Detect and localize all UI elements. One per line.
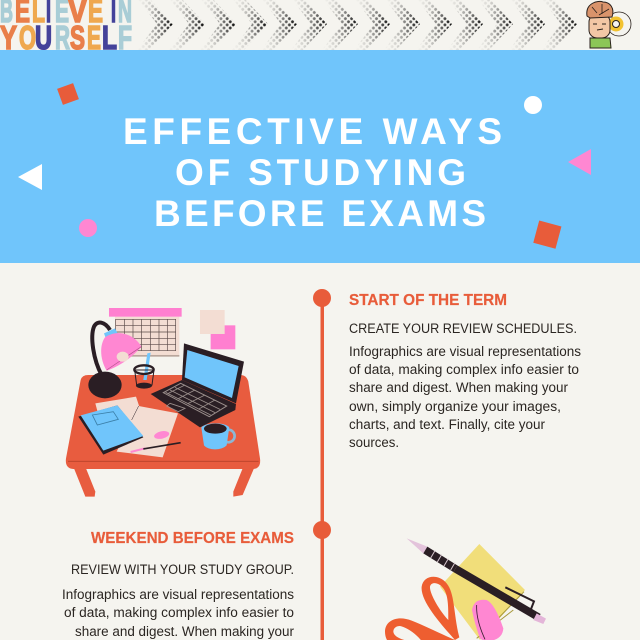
banner background <box>0 50 640 263</box>
mechanical pencil <box>407 538 546 624</box>
header strip lettering: believe in yourself: E <box>87 19 101 56</box>
yellow notepad <box>440 544 525 640</box>
pink eraser <box>472 600 503 640</box>
text block: start of the term: charts, and text. Finally, cite your <box>349 417 545 432</box>
illustration: school supplies <box>385 538 546 640</box>
text block: weekend before exams: REVIEW WITH YOUR STUDY GROUP. <box>71 562 294 577</box>
title: OF STUDYING <box>175 152 466 193</box>
notebook <box>78 405 143 455</box>
title <box>123 111 502 234</box>
header strip lettering: believe in yourself <box>0 0 132 56</box>
halftone chevron band <box>137 0 577 50</box>
header strip lettering: believe in yourself: U <box>35 19 52 56</box>
text block: start of the term: share and digest. When making your <box>349 380 568 395</box>
timeline <box>313 289 331 640</box>
text block: start of the term: START OF THE TERM <box>349 292 507 309</box>
sticky notes <box>200 310 235 349</box>
title: EFFECTIVE WAYS <box>123 111 502 152</box>
pen cup <box>134 353 154 389</box>
text block: weekend before exams: Infographics are visual representations <box>62 587 294 602</box>
header strip lettering: believe in yourself: R <box>55 19 70 56</box>
title: BEFORE EXAMS <box>154 193 486 234</box>
eraser and pen <box>131 430 181 452</box>
header strip lettering: believe in yourself: S <box>70 19 85 56</box>
text block: start of the term: own, simply organize your images, <box>349 399 561 414</box>
header strip lettering: believe in yourself: O <box>19 19 36 56</box>
text block: weekend before exams: of data, making complex info easier to <box>64 605 294 620</box>
illustration: study desk <box>66 308 260 497</box>
laptop <box>151 343 244 427</box>
decorative banner shapes <box>18 83 591 249</box>
text block: weekend before exams: share and digest. When making your <box>75 624 294 639</box>
header strip lettering: believe in yourself: L <box>102 19 117 56</box>
icon: person with brain and gear <box>587 1 631 48</box>
calendar <box>109 308 182 357</box>
papers <box>95 397 178 457</box>
text block: start of the term: Infographics are visual representations <box>349 344 581 359</box>
text block: start of the term: CREATE YOUR REVIEW SCHEDULES. <box>349 321 577 336</box>
text block: weekend before exams: WEEKEND BEFORE EXAMS <box>91 530 294 547</box>
text block: start of the term <box>349 292 581 450</box>
desk lamp <box>88 323 141 398</box>
scissors <box>385 577 459 640</box>
text block: start of the term: sources. <box>349 435 399 450</box>
desk <box>66 375 260 497</box>
coffee mug <box>201 423 235 449</box>
text block: start of the term: of data, making complex info easier to <box>349 362 579 377</box>
header strip lettering: believe in yourself: Y <box>0 19 17 56</box>
text block: weekend before exams <box>62 530 294 639</box>
header strip lettering: believe in yourself: F <box>118 19 132 56</box>
